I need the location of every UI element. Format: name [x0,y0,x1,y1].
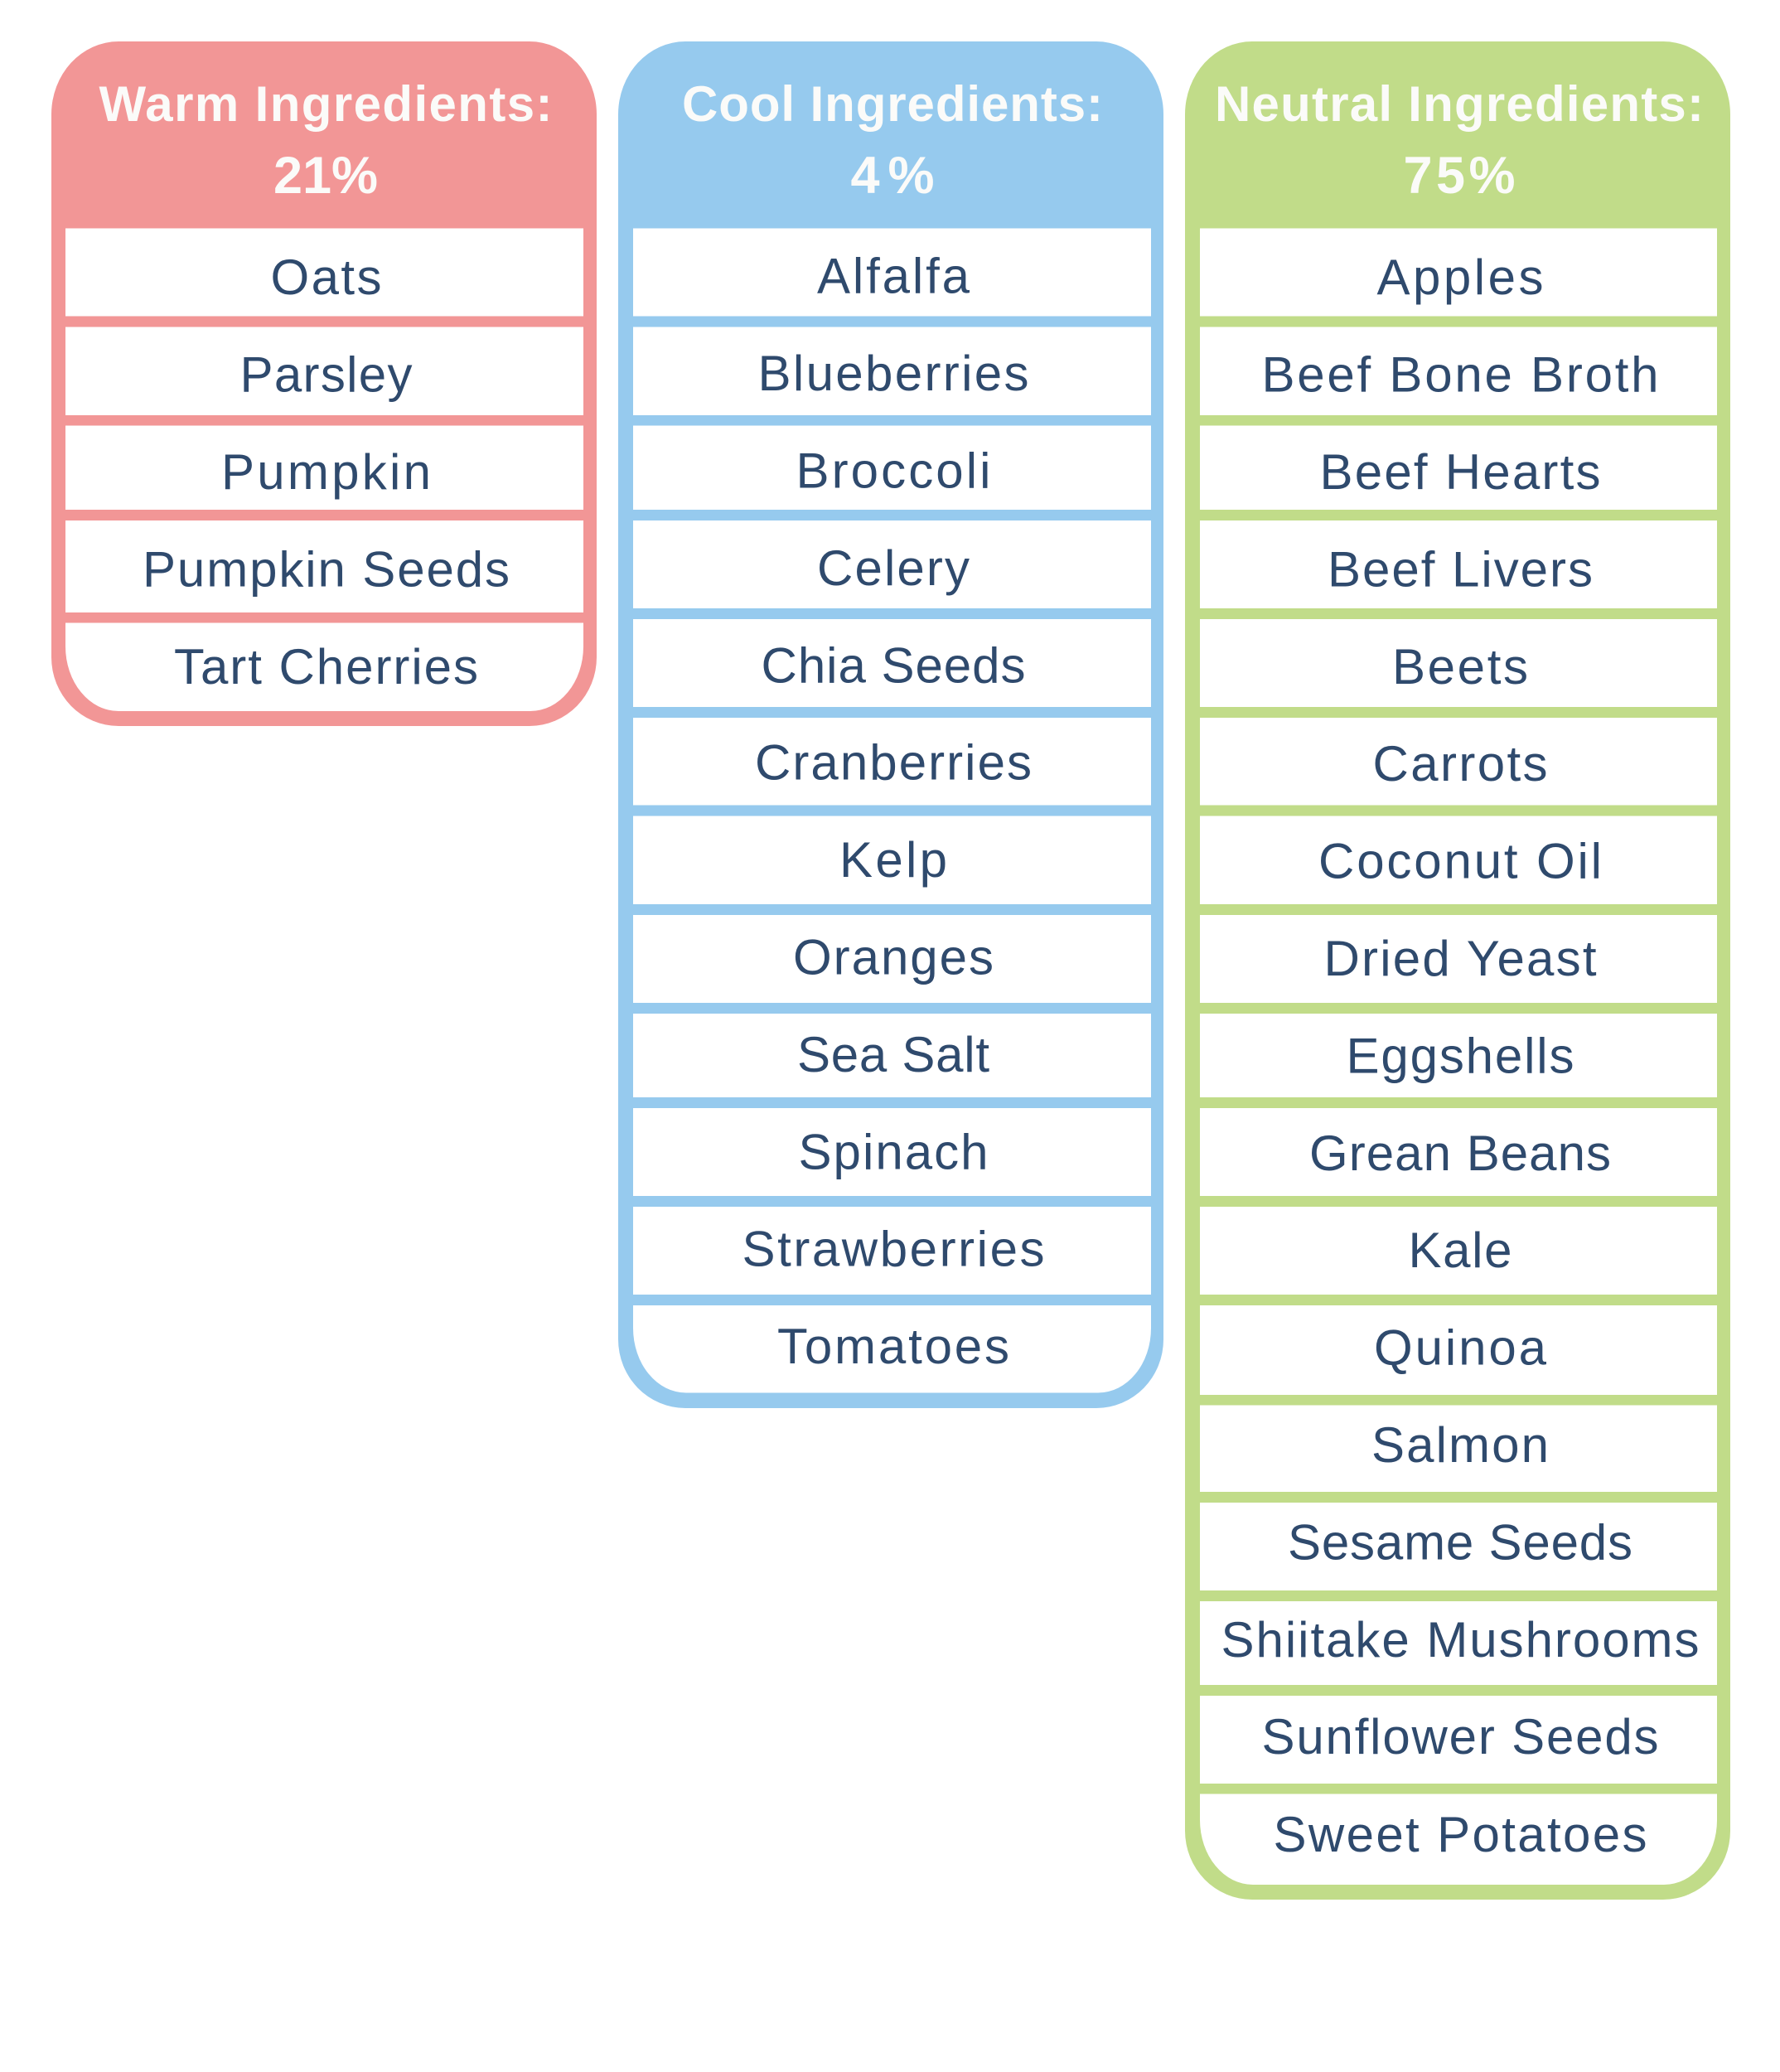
row: Sweet Potatoes [1200,1794,1717,1885]
row: Spinach [633,1108,1151,1196]
row: Carrots: Carrots [1372,736,1548,792]
row: Beef Livers [1200,520,1717,608]
row: Pumpkin: Pumpkin [221,444,431,500]
row: Kale [1200,1207,1717,1295]
row: Cranberries [633,718,1151,806]
row: Tart Cherries [65,623,583,711]
row: Beef Bone Broth [1200,327,1717,415]
row: Chia Seeds: Chia Seeds [761,637,1026,693]
row: Eggshells [1200,1014,1717,1097]
row: Blueberries [633,327,1151,415]
row: Salmon: Salmon [1371,1417,1549,1473]
row: Beef Hearts [1200,426,1717,510]
heading: neutral ingredients 75%: 75% [1404,147,1515,205]
row: Coconut Oil [1200,816,1717,904]
row: Strawberries [633,1207,1151,1295]
row: Spinach: Spinach [799,1124,988,1179]
row: Celery [633,520,1151,608]
row: Celery: Celery [817,540,970,596]
heading: cool ingredients 4%: Cool Ingredients: [682,76,1103,132]
panel: neutral ingredients [1185,41,1730,1900]
row: Sunflower Seeds [1200,1696,1717,1784]
row: Chia Seeds [633,619,1151,707]
row: Kelp [633,816,1151,904]
row: Pumpkin [65,426,583,510]
row: Tart Cherries: Tart Cherries [174,639,478,695]
row: Oats [65,229,583,317]
heading: neutral ingredients 75% [1215,76,1704,205]
row: Blueberries: Blueberries [757,346,1029,401]
row: Beef Hearts: Beef Hearts [1319,444,1601,500]
row: Salmon [1200,1406,1717,1492]
panel: cool ingredients [618,41,1163,1408]
row: Quinoa [1200,1305,1717,1395]
row: Dried Yeast [1200,915,1717,1003]
row: Eggshells: Eggshells [1346,1028,1574,1083]
row: Grean Beans [1200,1108,1717,1196]
row: Beef Livers: Beef Livers [1328,541,1593,597]
row: Oranges [633,915,1151,1003]
row: Cranberries: Cranberries [755,735,1032,791]
row: Parsley: Parsley [240,347,413,403]
row: Sesame Seeds: Sesame Seeds [1288,1514,1632,1570]
heading: cool ingredients 4% [682,76,1103,205]
row: Pumpkin Seeds: Pumpkin Seeds [143,541,510,597]
heading: cool ingredients 4%: 4% [850,147,935,205]
row: Carrots [1200,718,1717,806]
row: Broccoli [633,426,1151,510]
row: Sea Salt: Sea Salt [797,1027,989,1082]
heading: warm ingredients 21%: Warm Ingredients: [99,76,552,132]
panel: warm ingredients [51,41,597,726]
heading: neutral ingredients 75%: Neutral Ingredients: [1215,76,1704,132]
row: Sunflower Seeds: Sunflower Seeds [1261,1709,1659,1765]
row: Kelp: Kelp [839,832,947,888]
row: Shiitake Mushrooms [1200,1601,1717,1685]
row: Tomatoes: Tomatoes [777,1319,1009,1374]
row: Shiitake Mushrooms: Shiitake Mushrooms [1221,1612,1699,1668]
row: Sea Salt [633,1014,1151,1097]
row: Strawberries: Strawberries [742,1222,1044,1277]
row: Oats: Oats [270,249,381,305]
row: Dried Yeast: Dried Yeast [1324,931,1597,986]
row: Coconut Oil: Coconut Oil [1318,834,1602,889]
row: Grean Beans: Grean Beans [1309,1126,1611,1181]
row: Sweet Potatoes: Sweet Potatoes [1273,1807,1647,1862]
row: Broccoli: Broccoli [796,443,991,498]
row: Beets [1200,619,1717,707]
row: Beets: Beets [1392,639,1528,695]
heading: warm ingredients 21% [99,76,552,205]
row: Alfalfa [633,229,1151,317]
row: Kale: Kale [1409,1222,1512,1278]
row: Pumpkin Seeds [65,520,583,612]
row: Quinoa: Quinoa [1374,1320,1547,1376]
row: Beef Bone Broth: Beef Bone Broth [1261,347,1659,403]
row: Sesame Seeds [1200,1503,1717,1590]
row: Apples [1200,229,1717,317]
heading: warm ingredients 21%: 21% [273,147,378,205]
row: Apples: Apples [1377,249,1543,305]
row: Parsley [65,327,583,415]
row: Alfalfa: Alfalfa [817,249,970,304]
row: Oranges: Oranges [793,930,994,985]
row: Tomatoes [633,1305,1151,1392]
